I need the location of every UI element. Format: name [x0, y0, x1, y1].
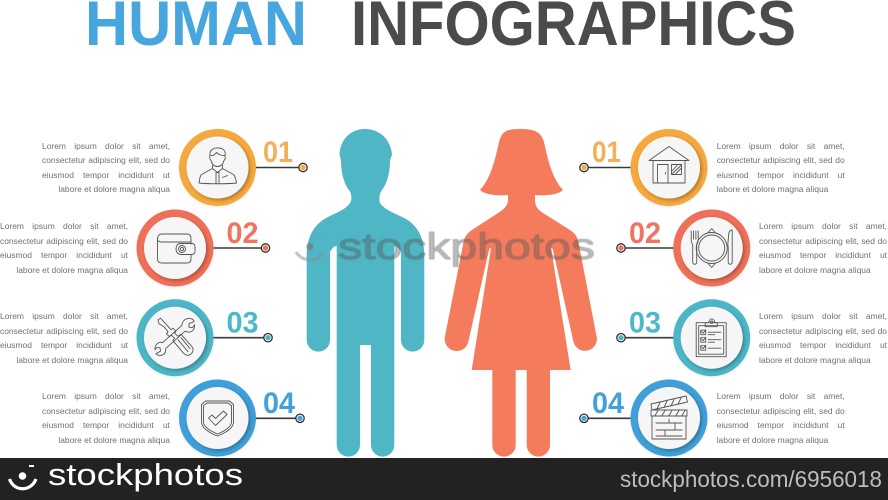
- description text: Lorem ipsum dolor sit amet,: [0, 311, 128, 321]
- ring: [136, 210, 214, 286]
- description text: [42, 389, 172, 449]
- description text: eiusmod tempor incididunt ut: [717, 420, 845, 430]
- male silhouette: [307, 129, 424, 457]
- right item 02: [617, 210, 888, 286]
- description text: eiusmod tempor incididunt ut: [42, 170, 170, 180]
- description text: labore et dolore magna aliqua: [58, 184, 170, 194]
- description text: Lorem ipsum dolor sit amet,: [717, 391, 845, 401]
- icon: wallet: [158, 234, 195, 263]
- description text: consectetur adipiscing elit, sed do: [42, 406, 170, 416]
- description text: consectetur adipiscing elit, sed do: [717, 406, 845, 416]
- number: 03: [629, 306, 661, 340]
- description text: consectetur adipiscing elit, sed do: [759, 326, 887, 336]
- footer bar: [0, 457, 888, 500]
- connector: [250, 163, 307, 172]
- description text: consectetur adipiscing elit, sed do: [717, 155, 845, 165]
- description text: eiusmod tempor incididunt ut: [0, 250, 128, 260]
- left item 01: [42, 129, 307, 206]
- description text: eiusmod tempor incididunt ut: [0, 340, 128, 350]
- right item 04: [580, 380, 847, 456]
- description text: consectetur adipiscing elit, sed do: [0, 326, 128, 336]
- watermark: [296, 226, 595, 267]
- description text: labore et dolore magna aliqua: [58, 435, 170, 445]
- description text: consectetur adipiscing elit, sed do: [759, 236, 887, 246]
- description text: Lorem ipsum dolor sit amet,: [759, 311, 887, 321]
- connector: [208, 334, 272, 342]
- icon: businessman: [199, 148, 236, 184]
- description text: labore et dolore magna aliqua: [717, 435, 828, 445]
- description text: Lorem ipsum dolor sit amet,: [42, 391, 170, 401]
- description text: [0, 219, 130, 279]
- description text: consectetur adipiscing elit, sed do: [42, 155, 170, 165]
- icon: wrench and screwdriver: [155, 318, 195, 355]
- icon: house: [649, 146, 689, 183]
- icon: shield with check: [202, 401, 234, 436]
- connector: [617, 334, 680, 342]
- connector: [617, 244, 680, 252]
- description text: [0, 309, 130, 369]
- description text: labore et dolore magna aliqua: [16, 265, 128, 275]
- description text: eiusmod tempor incididunt ut: [759, 250, 887, 260]
- female silhouette: [445, 129, 597, 457]
- number: 03: [226, 306, 258, 340]
- ring: [630, 380, 708, 456]
- number: 04: [592, 387, 625, 420]
- icon: clipboard checklist: [696, 319, 726, 357]
- description text: Lorem ipsum dolor sit amet,: [0, 221, 128, 231]
- description text: eiusmod tempor incididunt ut: [759, 340, 887, 350]
- description text: Lorem ipsum dolor sit amet,: [759, 221, 887, 231]
- connector: [208, 244, 270, 252]
- description text: Lorem ipsum dolor sit amet,: [717, 141, 845, 151]
- ring: [179, 129, 256, 206]
- right item 01: [580, 129, 847, 206]
- description text: labore et dolore magna aliqua: [759, 265, 871, 275]
- description text: [759, 309, 888, 369]
- connector: [250, 414, 304, 422]
- footer logo: [10, 466, 36, 489]
- icon: plate and cutlery: [691, 228, 732, 268]
- right item 03: [617, 299, 888, 376]
- number: 01: [263, 136, 293, 169]
- watermark text: stockphotos: [338, 226, 595, 267]
- description text: labore et dolore magna aliqua: [759, 354, 871, 364]
- left item 03: [0, 299, 272, 376]
- ring: [136, 299, 214, 376]
- footer brand name: stockphotos: [48, 457, 243, 492]
- left item 02: [0, 210, 270, 286]
- description text: labore et dolore magna aliqua: [717, 184, 828, 194]
- description text: [717, 389, 847, 449]
- description text: Lorem ipsum dolor sit amet,: [42, 141, 170, 151]
- description text: consectetur adipiscing elit, sed do: [0, 236, 128, 246]
- description text: eiusmod tempor incididunt ut: [42, 420, 170, 430]
- watermark logo: [296, 236, 324, 260]
- description text: labore et dolore magna aliqua: [16, 354, 128, 364]
- left item 04: [42, 380, 304, 456]
- title: [85, 0, 796, 59]
- description text: eiusmod tempor incididunt ut: [717, 170, 845, 180]
- connector: [580, 414, 636, 422]
- ring: [179, 380, 256, 456]
- connector: [580, 163, 636, 172]
- number: 04: [263, 387, 296, 420]
- number: 01: [592, 136, 621, 169]
- footer image id: stockphotos.com/6956018: [620, 466, 882, 492]
- ring: [630, 129, 708, 206]
- ring: [673, 210, 750, 286]
- ring: [673, 299, 750, 376]
- description text: [717, 139, 847, 199]
- description text: [42, 139, 172, 199]
- icon: clapperboard: [651, 396, 688, 439]
- number: 02: [629, 217, 661, 250]
- description text: [759, 219, 888, 279]
- number: 02: [226, 217, 258, 250]
